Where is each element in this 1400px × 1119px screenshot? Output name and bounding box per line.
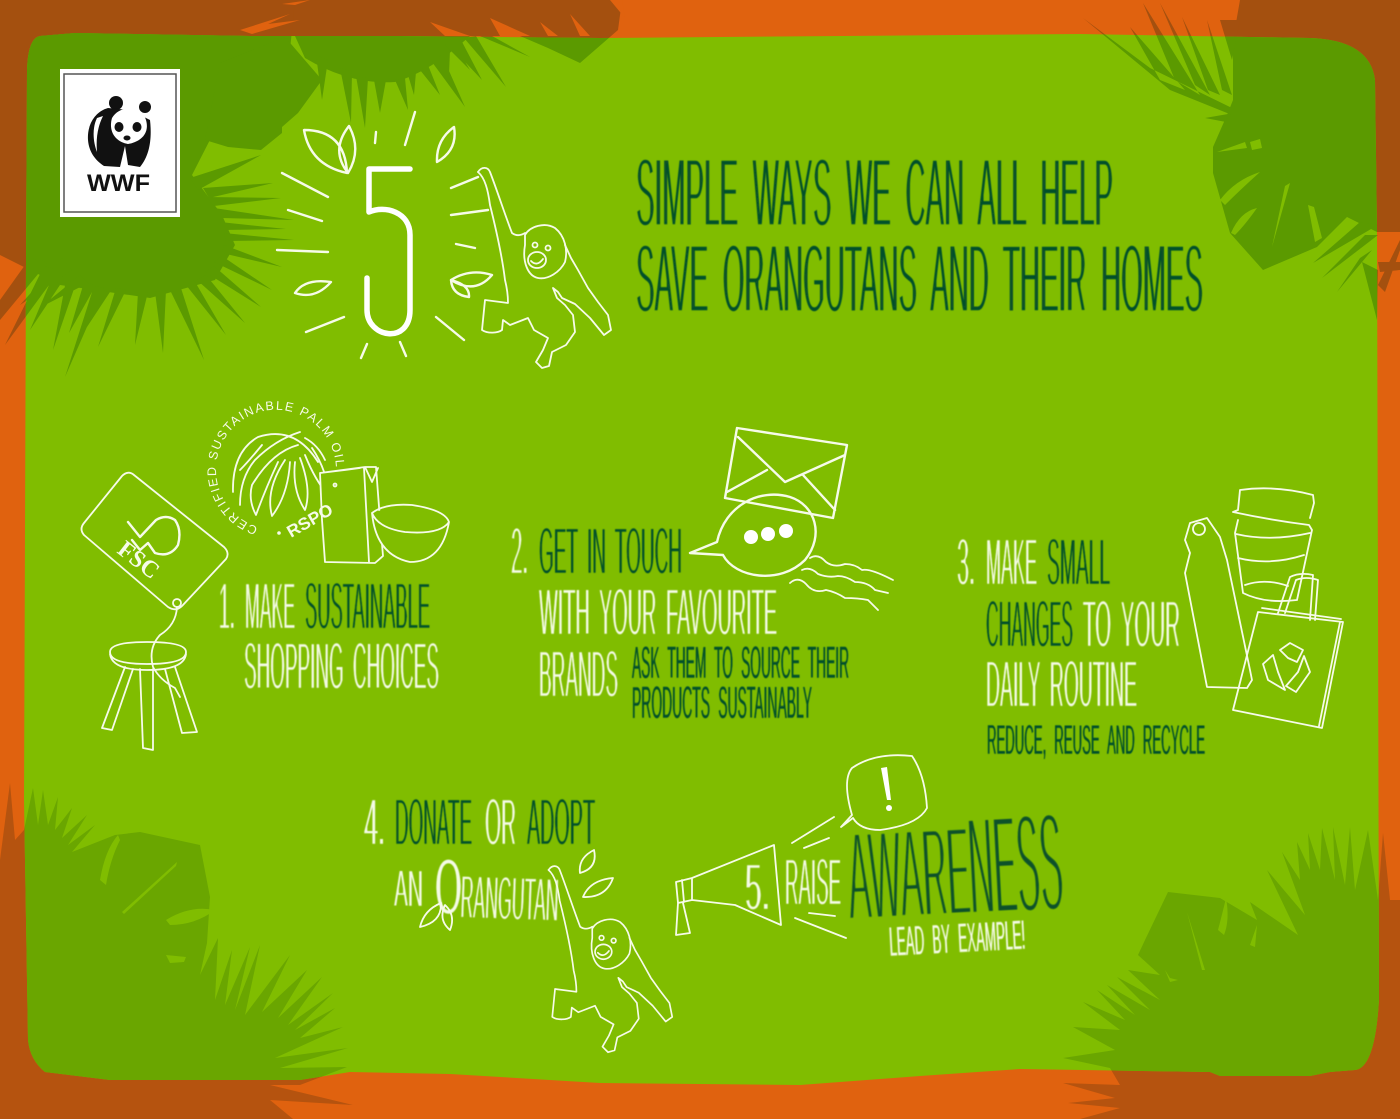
text: RANGUTAN	[460, 863, 560, 935]
step 4 illustration: orangutan and leaves	[420, 850, 672, 1052]
icon: reusable cup	[1233, 488, 1314, 601]
text: LEAD BY EXAMPLE!	[888, 911, 1026, 965]
foliage leaf slits	[100, 139, 1322, 982]
icon: panda	[88, 96, 151, 167]
step 3 text: CHANGES	[986, 587, 1073, 662]
icon: stool	[102, 642, 197, 750]
step 4 text: OR	[485, 785, 516, 860]
step 3 text: SMALL	[1047, 525, 1110, 600]
RSPO seal text: CERTIFIED SUSTAINABLE PALM OIL	[207, 401, 344, 534]
icon: palm ball	[233, 432, 328, 516]
text: SHOPPING CHOICES	[244, 629, 439, 704]
RSPO seal label: RSPO	[284, 500, 336, 541]
icon: bowl	[372, 508, 448, 562]
icon: tote bag	[1233, 574, 1343, 728]
title	[636, 138, 1203, 333]
text: GET IN TOUCH	[539, 514, 682, 589]
step 3 text: 3.	[957, 525, 975, 600]
foliage: bottom corners on panel	[24, 789, 1379, 1080]
icon: speech bubble	[690, 495, 816, 576]
icon: alert bubble	[841, 755, 927, 830]
orange blade highlights on top frame	[240, 0, 625, 36]
step 3 text	[957, 525, 1180, 722]
step 1 illustration: RSPO seal, carton and bowl	[207, 401, 450, 564]
text: TO YOUR	[1083, 587, 1180, 662]
icon: leaves	[420, 850, 613, 930]
step 3 illustration: cup, bottle and bag	[1185, 488, 1343, 728]
icon: recycle symbol	[1263, 643, 1310, 692]
step 1 text: 1.	[219, 569, 235, 644]
text: ADOPT	[527, 785, 595, 860]
logo: WWF panda	[60, 69, 180, 217]
step 5 text: 5.	[745, 850, 770, 925]
text: AWARE	[844, 800, 973, 949]
icon: big number 5 with rays	[277, 112, 492, 358]
step 5 illustration: megaphone and speech bubble	[676, 755, 927, 938]
foliage shadow on frame: bottom corners	[0, 783, 1400, 1119]
FSC label: FSC	[112, 536, 164, 585]
step 5 text	[745, 782, 1066, 965]
icon: water bottle	[1185, 518, 1252, 688]
text: NESS	[964, 782, 1066, 945]
icon: leaves	[295, 126, 492, 297]
step 2 text	[511, 514, 777, 712]
step 2 text: BRANDS	[539, 637, 618, 712]
icon: FSC tree	[128, 517, 179, 554]
illustration: orangutan hanging	[478, 168, 611, 368]
icon: wavy lines	[790, 556, 893, 610]
step 4 text: O	[435, 842, 462, 931]
step 2 illustration: envelope and speech bubble	[690, 428, 893, 610]
step 4 text: 4.	[364, 785, 385, 860]
step 2 sub text	[632, 637, 849, 728]
step 1 illustration: FSC tag and stool	[82, 473, 228, 750]
logo text: WWF	[87, 170, 150, 197]
step 4 text: AN	[394, 859, 423, 919]
text: SUSTAINABLE	[305, 569, 430, 644]
icon: envelope	[725, 428, 847, 518]
step 4 text	[364, 785, 595, 935]
step 1 text: MAKE	[245, 569, 295, 644]
foliage shadow on frame: top corners	[0, 0, 1400, 377]
step 4 text: DONATE	[395, 785, 472, 860]
step 5 text: RAISE	[785, 845, 841, 920]
icon: drink carton	[320, 467, 383, 563]
foliage: top corners on panel	[26, 33, 1378, 376]
text: WITH YOUR FAVOURITE	[539, 575, 777, 650]
text: PRODUCTS SUSTAINABLY	[632, 677, 812, 728]
icon: megaphone	[676, 845, 781, 935]
text: ASK THEM TO SOURCE THEIR	[632, 637, 849, 688]
step 2 text: 2.	[511, 514, 528, 589]
step 1 text	[219, 569, 439, 704]
icon: sound rays	[792, 817, 846, 938]
step 3 text: MAKE	[986, 525, 1037, 600]
